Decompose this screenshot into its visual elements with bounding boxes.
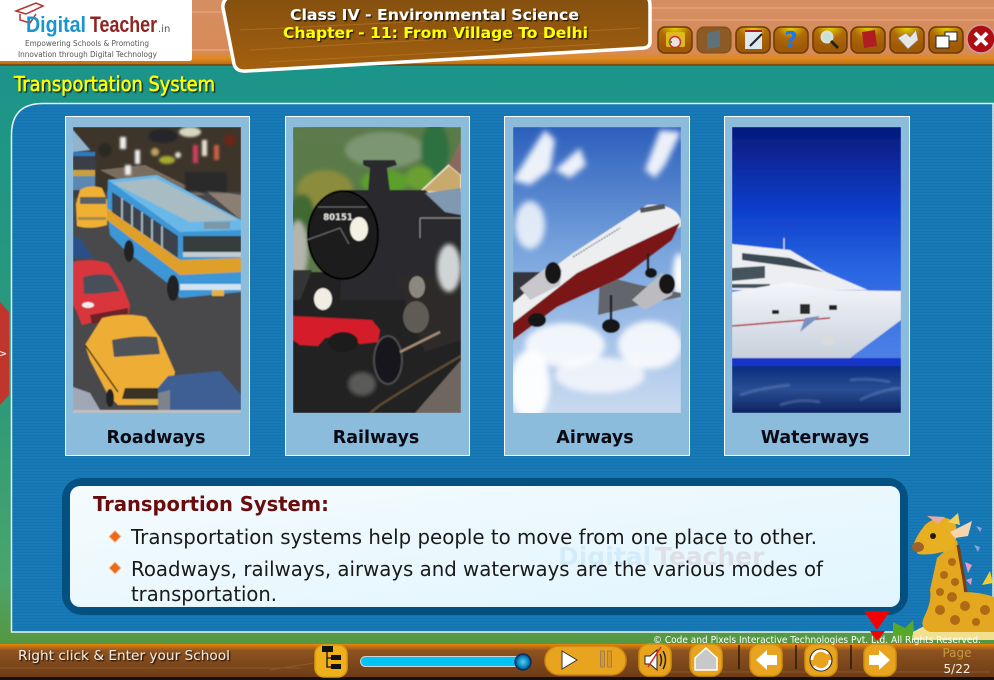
icon: reference book [697, 27, 731, 53]
blue car [73, 237, 93, 258]
label: waterways: Waterways [761, 428, 869, 448]
cockpit [640, 204, 665, 213]
bullet two: transportation. [131, 582, 277, 606]
toolbar icons [658, 25, 994, 54]
near engine nacelle [632, 273, 675, 310]
icon: close [967, 25, 994, 53]
icon: open book [890, 27, 924, 53]
smoke left [288, 220, 308, 280]
title plaque [223, 0, 650, 71]
stripe [732, 318, 830, 326]
cylinders [406, 300, 460, 351]
toolbar separators [739, 645, 851, 669]
smokebox door [308, 191, 378, 279]
giraffe mascot [893, 513, 994, 640]
chimney [363, 160, 397, 192]
icon: next button [864, 644, 896, 676]
label: airways: Airways [556, 428, 634, 448]
label: railways: Railways [333, 428, 419, 448]
watermark [558, 542, 765, 571]
superstructure [732, 244, 868, 290]
header wood bar [0, 0, 994, 66]
number plate: 80151 [323, 213, 353, 223]
red pointer arrows [864, 611, 890, 641]
ballast [415, 360, 461, 413]
school prompt: Right click & Enter your School [18, 649, 230, 664]
icon: notepad [736, 27, 770, 53]
copyright: © Code and Pixels Interactive Technologies Pvt. Ltd. All Rights Reserved. [653, 635, 981, 646]
progress slider [360, 654, 531, 670]
bullet one: Transportation systems help people to move from one place to other. [130, 525, 817, 549]
yellow taxi [76, 186, 107, 228]
red buffer beam [293, 316, 380, 346]
steam [437, 244, 461, 292]
red car [73, 260, 130, 325]
bullet two [109, 557, 824, 606]
hull [732, 282, 901, 358]
logo wordmark: Digital [26, 12, 86, 37]
card: airways [504, 116, 690, 456]
logo tagline one: Empowering Schools & Promoting [25, 39, 149, 48]
label: roadways: Roadways [106, 428, 206, 448]
watermark: Teacher [655, 542, 765, 571]
logo domain: .in [158, 24, 170, 35]
play and pause control [545, 646, 626, 675]
logo wordmark second part: Teacher [90, 12, 157, 37]
photo: airplane [510, 127, 685, 420]
page counter: 5/22 [944, 662, 970, 676]
photo: street traffic [73, 127, 241, 413]
icon: window resize [929, 27, 963, 53]
left slide-out tab [0, 302, 9, 405]
large taxi [85, 315, 175, 405]
landing gear [611, 253, 648, 325]
icon: help [774, 27, 808, 54]
card: waterways [724, 116, 910, 456]
near wing [598, 275, 681, 315]
logo tagline two: Innovation through Digital Technology [18, 50, 157, 59]
bottom wood bar [0, 644, 994, 680]
bullet two: Roadways, railways, airways and waterways are the various modes of [131, 557, 824, 581]
photo: cruise ship [732, 127, 901, 413]
icon: home button [690, 644, 722, 676]
watermark: Digital [558, 542, 651, 571]
text box heading: Transportion System: [93, 492, 329, 516]
page counter: Page [942, 646, 972, 660]
title: class and subject: Class IV - Environmental Science [290, 6, 579, 24]
wheel [374, 336, 402, 384]
icon: tree menu button [315, 645, 347, 677]
blue cart [158, 371, 241, 410]
icon: mute button [639, 644, 671, 676]
logo panel [0, 0, 192, 61]
icon: magnifier [813, 27, 847, 53]
icon: help: ? [784, 28, 798, 54]
house gable [420, 165, 461, 192]
text box: transportation system [62, 478, 908, 615]
waterline [732, 358, 901, 367]
headlamps [350, 217, 368, 241]
title: chapter: Chapter - 11: From Village To Delhi [283, 24, 588, 42]
far wing [513, 272, 540, 304]
photo: steam locomotive [288, 122, 461, 413]
card: roadways [66, 116, 250, 456]
small bus [73, 147, 96, 198]
fuselage [513, 204, 681, 324]
icon: back button [750, 644, 782, 676]
icon: dictionary [851, 27, 885, 53]
main blue content panel [12, 104, 993, 632]
butterflies [965, 562, 972, 585]
boiler [340, 190, 461, 300]
icon: graduation cap [16, 3, 43, 23]
icon: replay button [805, 644, 837, 676]
icon: timer folder [658, 27, 692, 53]
page counter [942, 646, 972, 676]
sea [732, 366, 901, 413]
far engine nacelle [520, 268, 562, 300]
bus body [107, 175, 241, 298]
card: railways [286, 116, 470, 456]
heading: Transportation System [13, 72, 215, 96]
